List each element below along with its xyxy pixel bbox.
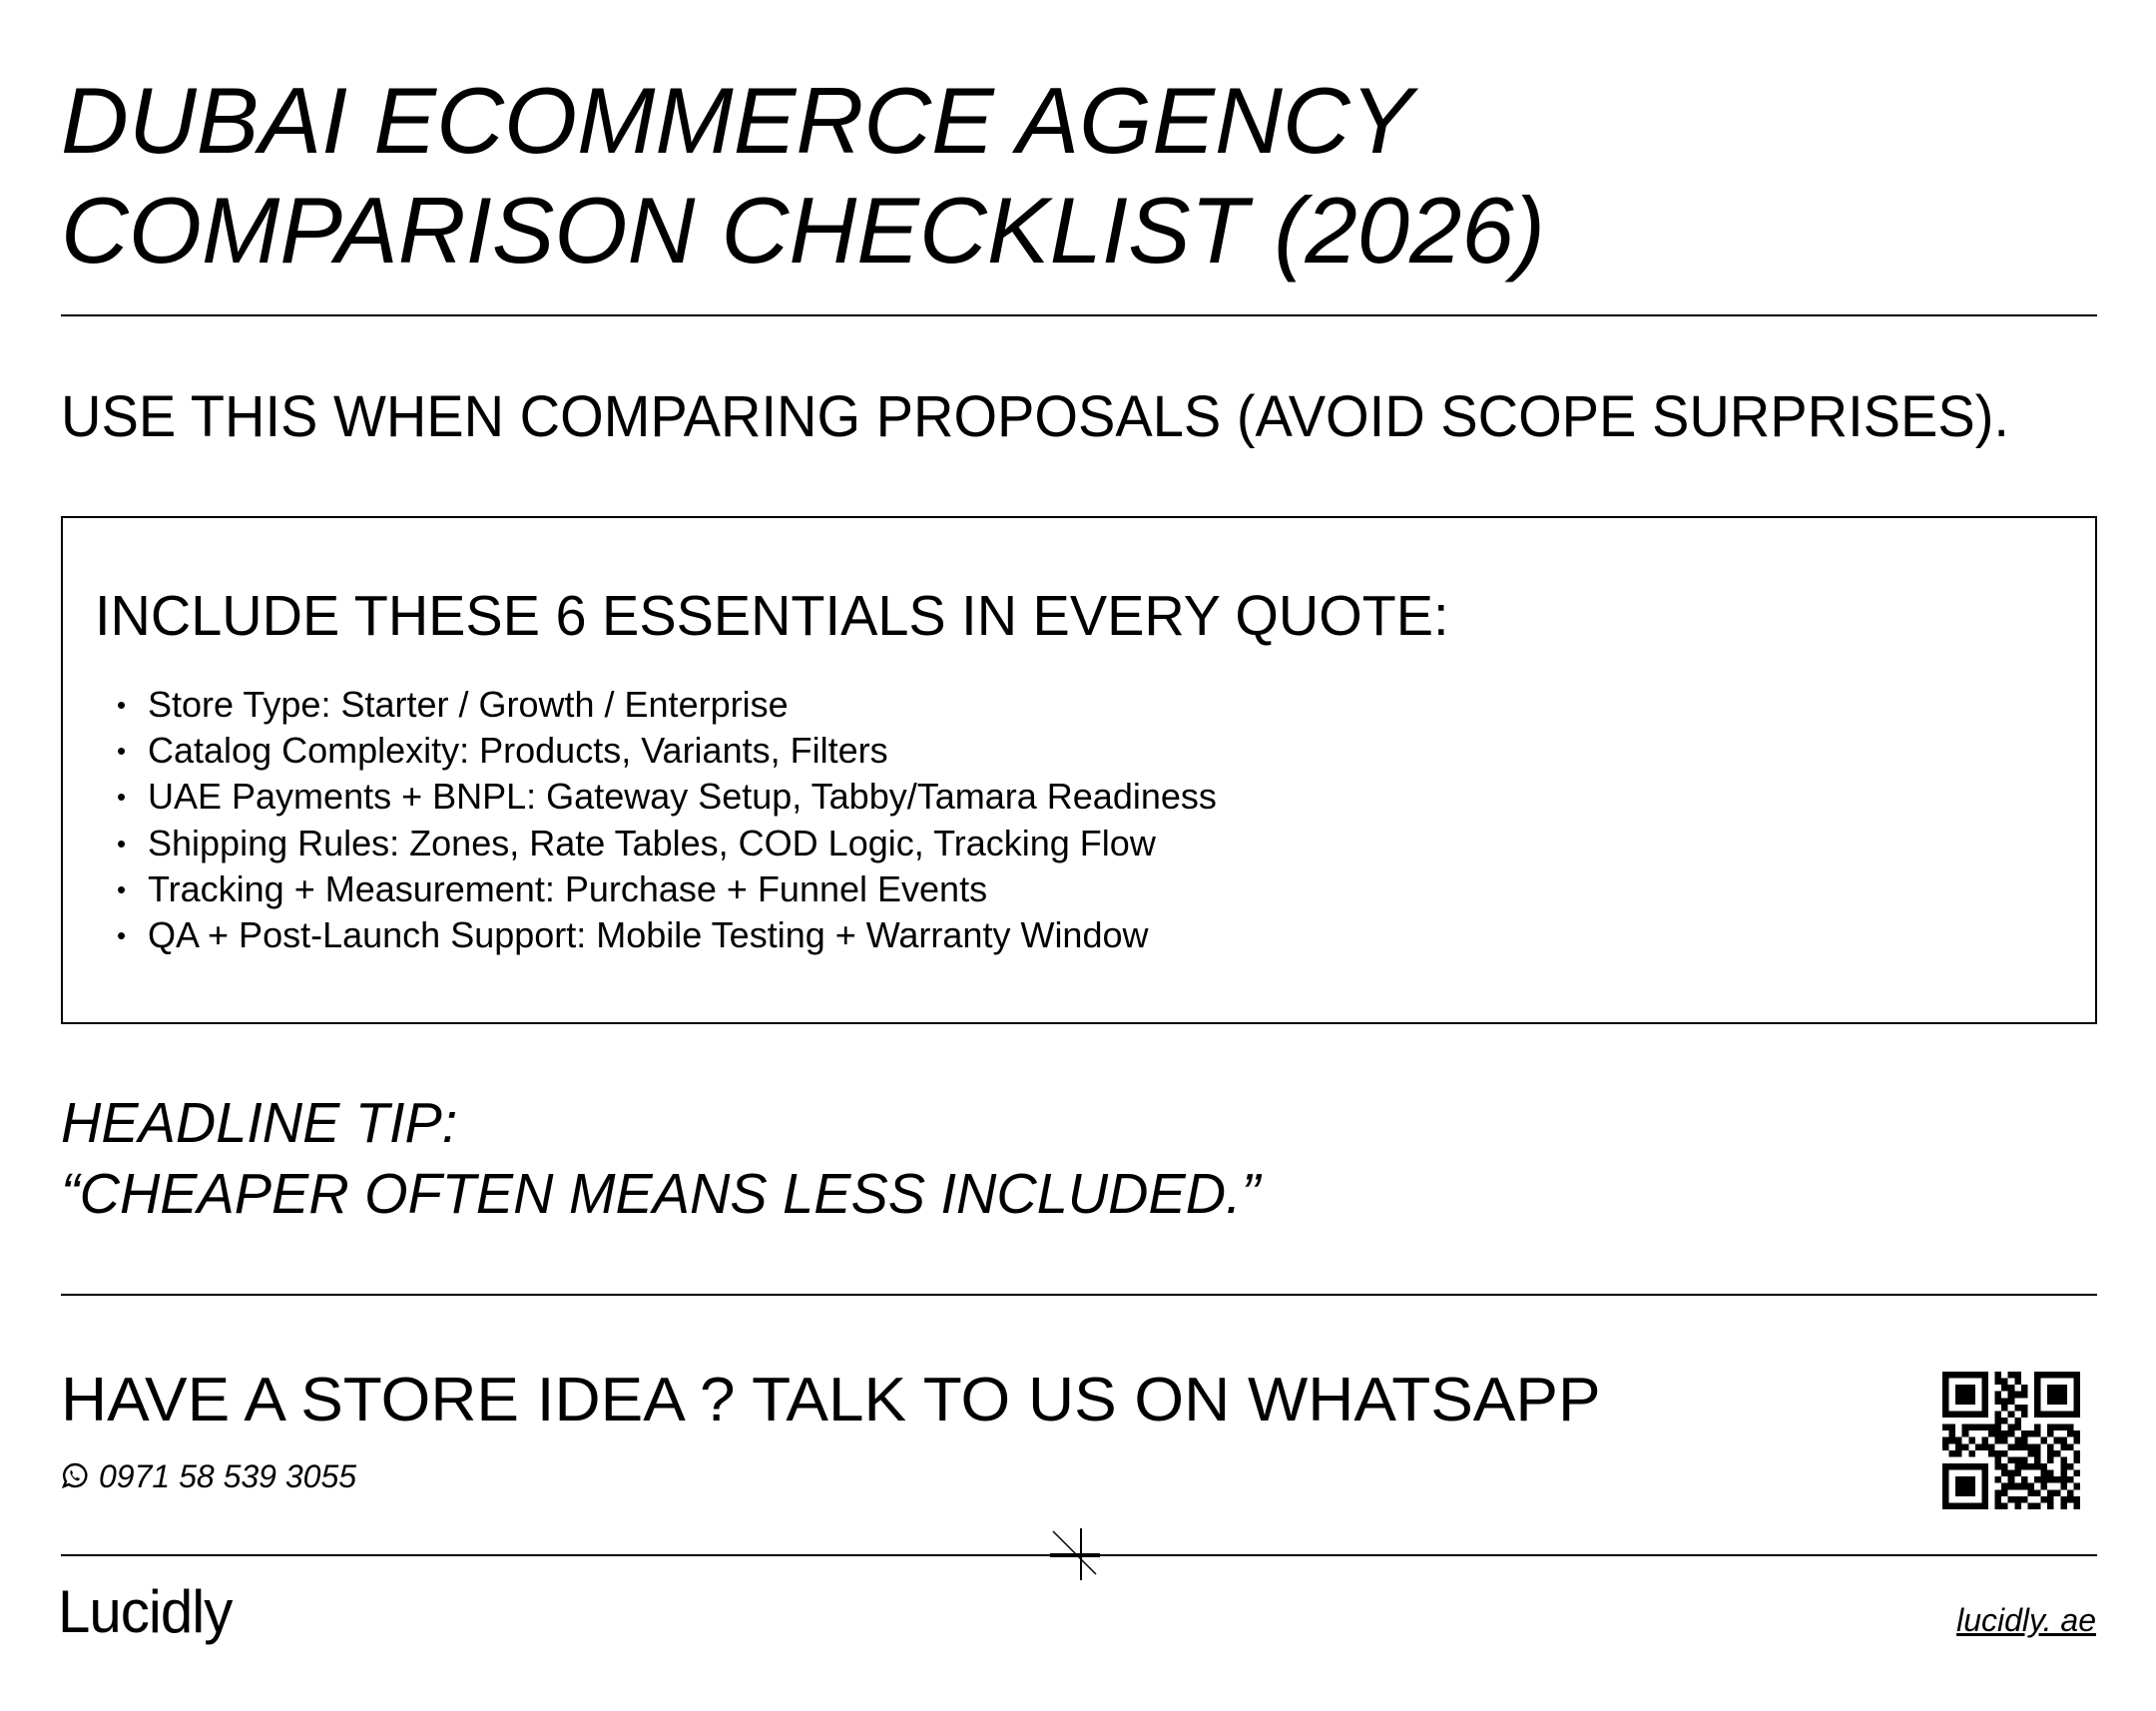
subtitle: USE THIS WHEN COMPARING PROPOSALS (AVOID SCOPE SURPRISES).: [61, 384, 2009, 449]
headline tip: [61, 1091, 1262, 1226]
icon: crosshair star: [1050, 1528, 1100, 1580]
checklist: Store Type: Starter / Growth / Enterprise: [148, 684, 789, 725]
phone with whatsapp icon: 0971 58 539 3055: [99, 1458, 356, 1494]
checklist: UAE Payments + BNPL: Gateway Setup, Tabby/Tamara Readiness: [148, 776, 1217, 817]
call to action: HAVE A STORE IDEA ? TALK TO US ON WHATSAPP: [61, 1366, 1601, 1434]
title: [61, 68, 1545, 283]
title: COMPARISON CHECKLIST (2026): [61, 178, 1545, 283]
headline tip: “CHEAPER OFTEN MEANS LESS INCLUDED.”: [61, 1162, 1260, 1226]
checklist: QA + Post-Launch Support: Mobile Testing + Warranty Window: [148, 914, 1148, 955]
checklist: Shipping Rules: Zones, Rate Tables, COD Logic, Tracking Flow: [148, 823, 1156, 863]
logo: Lucidly: Lucidly: [58, 1578, 232, 1645]
website link: lucidly. ae: [1956, 1602, 2096, 1638]
title: DUBAI ECOMMERCE AGENCY: [61, 68, 1412, 173]
QR code: [1942, 1372, 2080, 1509]
icon: whatsapp: [62, 1463, 88, 1489]
checklist: [118, 684, 1217, 955]
checklist: Catalog Complexity: Products, Variants, Filters: [148, 730, 888, 771]
checklist: Tracking + Measurement: Purchase + Funnel Events: [148, 868, 987, 909]
headline tip: HEADLINE TIP:: [61, 1091, 457, 1155]
panel: essentials: [61, 516, 2097, 1024]
panel heading: INCLUDE THESE 6 ESSENTIALS IN EVERY QUOTE:: [95, 584, 1449, 648]
